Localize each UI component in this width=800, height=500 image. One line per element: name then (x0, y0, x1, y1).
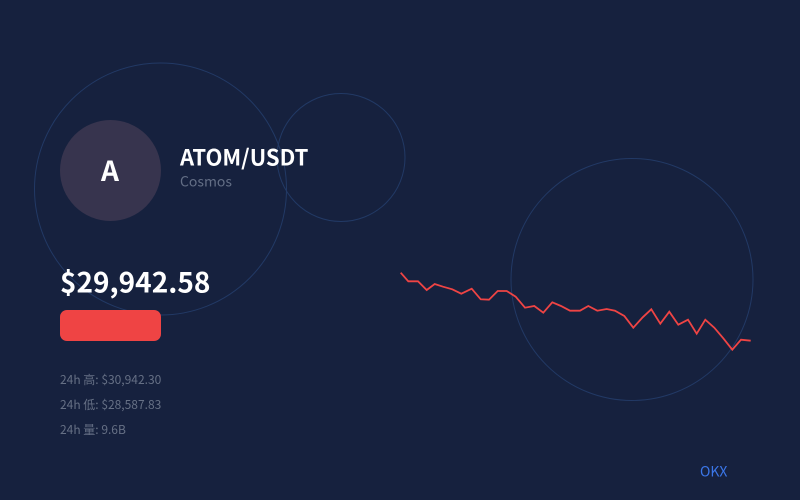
text: current price: $29,942.58 (60, 262, 210, 302)
icon: coin avatar (60, 120, 161, 221)
heading: trading pair: ATOM/USDT (179, 140, 309, 172)
stat: 24h high: 24h 高: $30,942.30 (60, 371, 162, 388)
decorative outline circles (34, 63, 753, 400)
text: coin name: Cosmos (180, 172, 232, 192)
stat: 24h volume: 24h 量: 9.6B (60, 421, 126, 438)
change badge (60, 310, 161, 341)
text: source label: OKX (700, 462, 727, 482)
line chart: price trend (401, 273, 751, 350)
icon: coin avatar: A (100, 150, 120, 190)
stats list (60, 371, 162, 438)
stat: 24h low: 24h 低: $28,587.83 (60, 396, 161, 413)
